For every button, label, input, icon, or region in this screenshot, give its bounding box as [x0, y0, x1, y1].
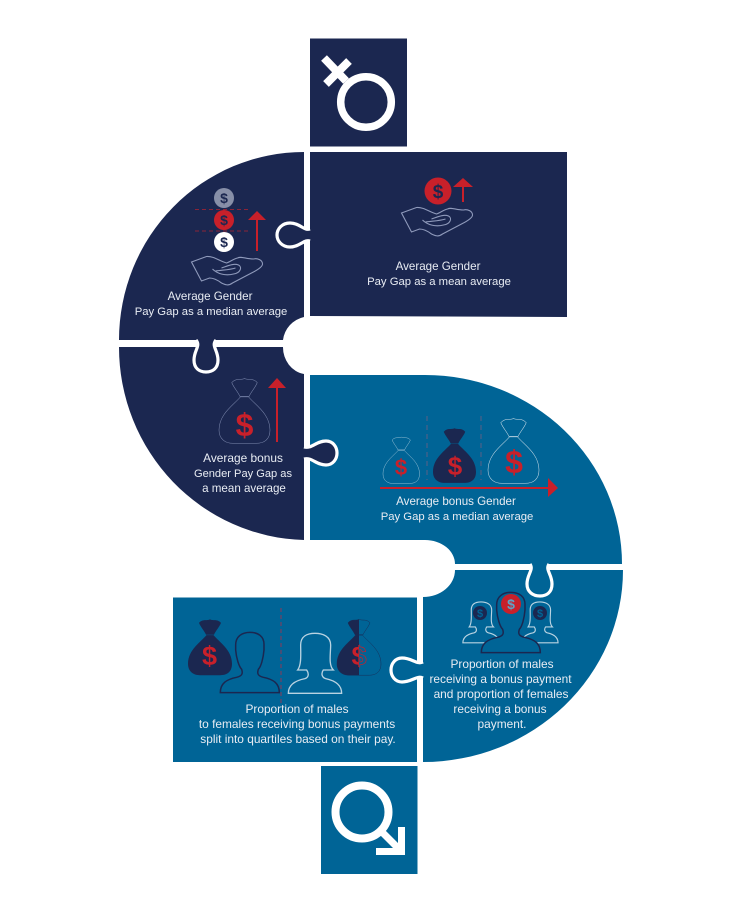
panel: proportion receiving bonus by quartile — [173, 598, 417, 762]
icon: three coins with arrow: $ — [220, 212, 228, 228]
text: proportion label: receiving a bonus — [453, 702, 547, 716]
text: proportion label: receiving a bonus payment — [429, 672, 572, 686]
text: quartile label: Proportion of males — [245, 702, 349, 716]
text: mean label: Average Gender — [396, 260, 481, 273]
text: median label: Pay Gap as a median average — [135, 306, 287, 318]
puzzle knob: bonus median to proportion — [527, 564, 552, 596]
panel: bonus mean pay gap — [119, 340, 337, 540]
puzzle knob: proportion to quartiles — [391, 658, 423, 682]
icon: three money bags with arrow: $ — [448, 451, 463, 481]
text: mean label: Pay Gap as a mean average — [367, 276, 511, 288]
icon: three money bags with arrow: $ — [395, 455, 407, 480]
icon: man with bag and woman with half bag: $ — [351, 641, 367, 671]
icon: three people with coins — [463, 592, 558, 653]
text: bonus median label: Pay Gap as a median average — [381, 511, 533, 523]
icon: three people with coins: $ — [477, 608, 483, 620]
icon: three coins with arrow — [192, 188, 266, 285]
panel: median average pay gap — [119, 152, 304, 340]
icon: money bag with arrow: $ — [236, 407, 254, 443]
text: proportion label: Proportion of males — [450, 657, 554, 671]
puzzle knob: bonus mean to bonus median — [304, 441, 337, 465]
icon: coin and hand with arrow: $ — [433, 182, 444, 203]
icon: male symbol — [336, 786, 402, 852]
icon: three people with coins: $ — [537, 608, 543, 620]
text: bonus median label: Average bonus Gender — [396, 495, 516, 508]
text: quartile label: split into quartiles based on their pay. — [200, 732, 396, 746]
panel: proportion receiving bonus — [391, 564, 623, 762]
text: bonus mean label: Gender Pay Gap as — [194, 468, 292, 480]
icon: three money bags with arrow — [380, 416, 558, 497]
text: quartile label: to females receiving bonus payments — [199, 717, 395, 731]
text: median label: Average Gender — [168, 290, 253, 303]
icon: three people with coins: $ — [507, 596, 515, 612]
puzzle knob: mean to median — [277, 223, 310, 247]
panel: mean average pay gap — [277, 152, 567, 317]
text: proportion label: and proportion of females — [434, 687, 568, 701]
icon: man with bag and woman with half bag: $ — [202, 641, 217, 671]
female symbol tile — [310, 38, 407, 146]
icon: three money bags with arrow: $ — [505, 444, 523, 480]
text: bonus mean label: a mean average — [202, 482, 286, 495]
text: proportion label: payment. — [478, 717, 526, 731]
icon: money bag with arrow — [219, 378, 286, 443]
icon: man with bag and woman with half bag — [188, 608, 381, 705]
icon: three coins with arrow: $ — [220, 234, 228, 250]
icon: three coins with arrow: $ — [220, 190, 228, 206]
puzzle knob: median to bonus mean — [194, 340, 218, 372]
text: bonus mean label: Average bonus — [203, 451, 283, 465]
icon: man with bag and woman with half bag: $ — [351, 641, 367, 671]
icon: coin and hand with arrow — [402, 178, 473, 236]
panel: bonus median pay gap — [310, 375, 622, 564]
male symbol tile — [321, 766, 418, 874]
icon: female symbol — [324, 58, 391, 127]
